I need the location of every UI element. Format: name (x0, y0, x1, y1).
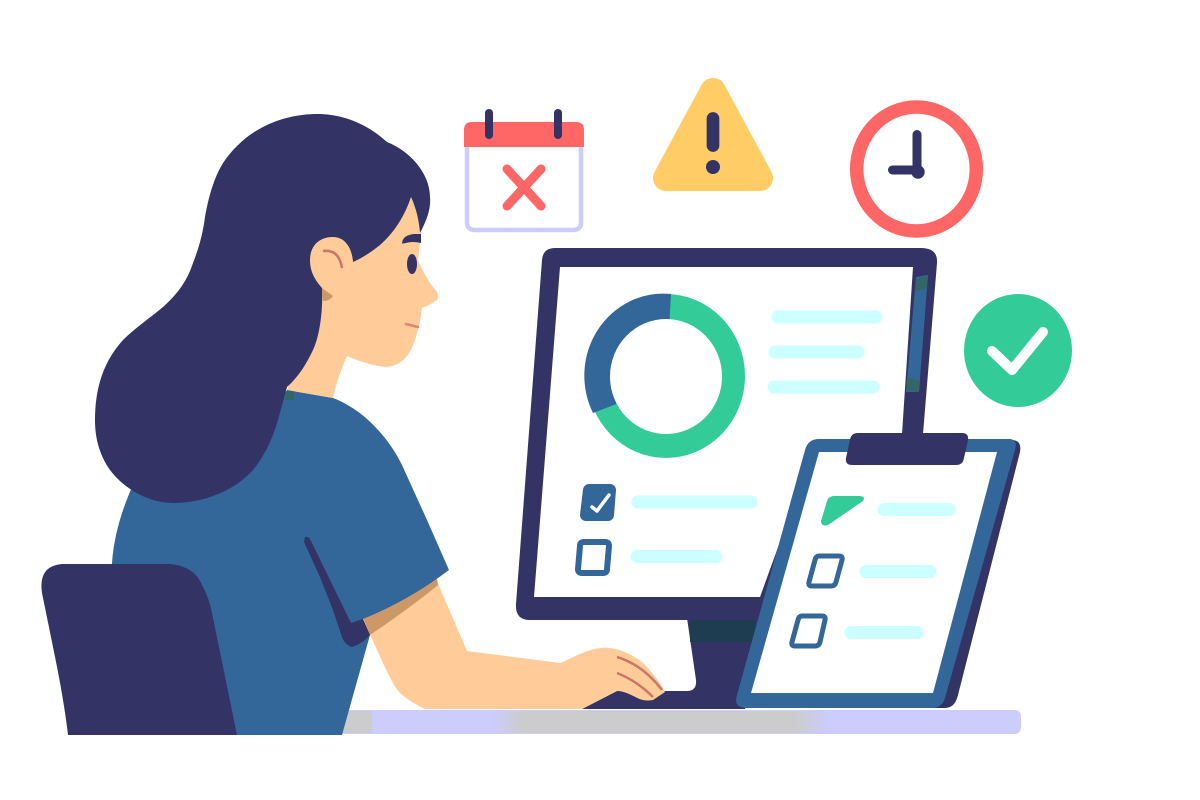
desk (340, 710, 1021, 734)
ear crease (323, 251, 342, 268)
icon: clock (857, 107, 976, 231)
fingers (617, 657, 662, 697)
neck and face (287, 197, 438, 398)
text placeholder lines (637, 317, 876, 556)
mouth (406, 324, 418, 327)
green tick item (821, 496, 864, 526)
hair (95, 114, 430, 503)
clipboard clip (846, 433, 968, 465)
woman (41, 114, 665, 735)
monitor (516, 248, 937, 620)
monitor stand (582, 618, 772, 709)
eyebrow (402, 234, 421, 244)
checked checkbox (586, 490, 610, 515)
eye (407, 254, 417, 274)
chair (41, 564, 237, 735)
clipboard checkbox 1 (809, 556, 842, 586)
torso (90, 390, 449, 735)
icon: green check badge (964, 294, 1072, 407)
icon: warning triangle (666, 91, 760, 178)
ear (310, 237, 353, 290)
donut chart (584, 294, 745, 458)
sleeve shadow (360, 565, 438, 635)
empty checkbox (578, 542, 609, 573)
clipboard (736, 433, 1020, 708)
monitor side strip (906, 275, 928, 392)
neck shirt patch (285, 390, 294, 400)
sleeve fold (304, 537, 370, 647)
clipboard lines (851, 510, 949, 632)
ear shadow (322, 288, 333, 301)
clipboard checkbox 2 (792, 616, 825, 646)
arm (360, 565, 665, 709)
icon: calendar with X (464, 113, 584, 230)
